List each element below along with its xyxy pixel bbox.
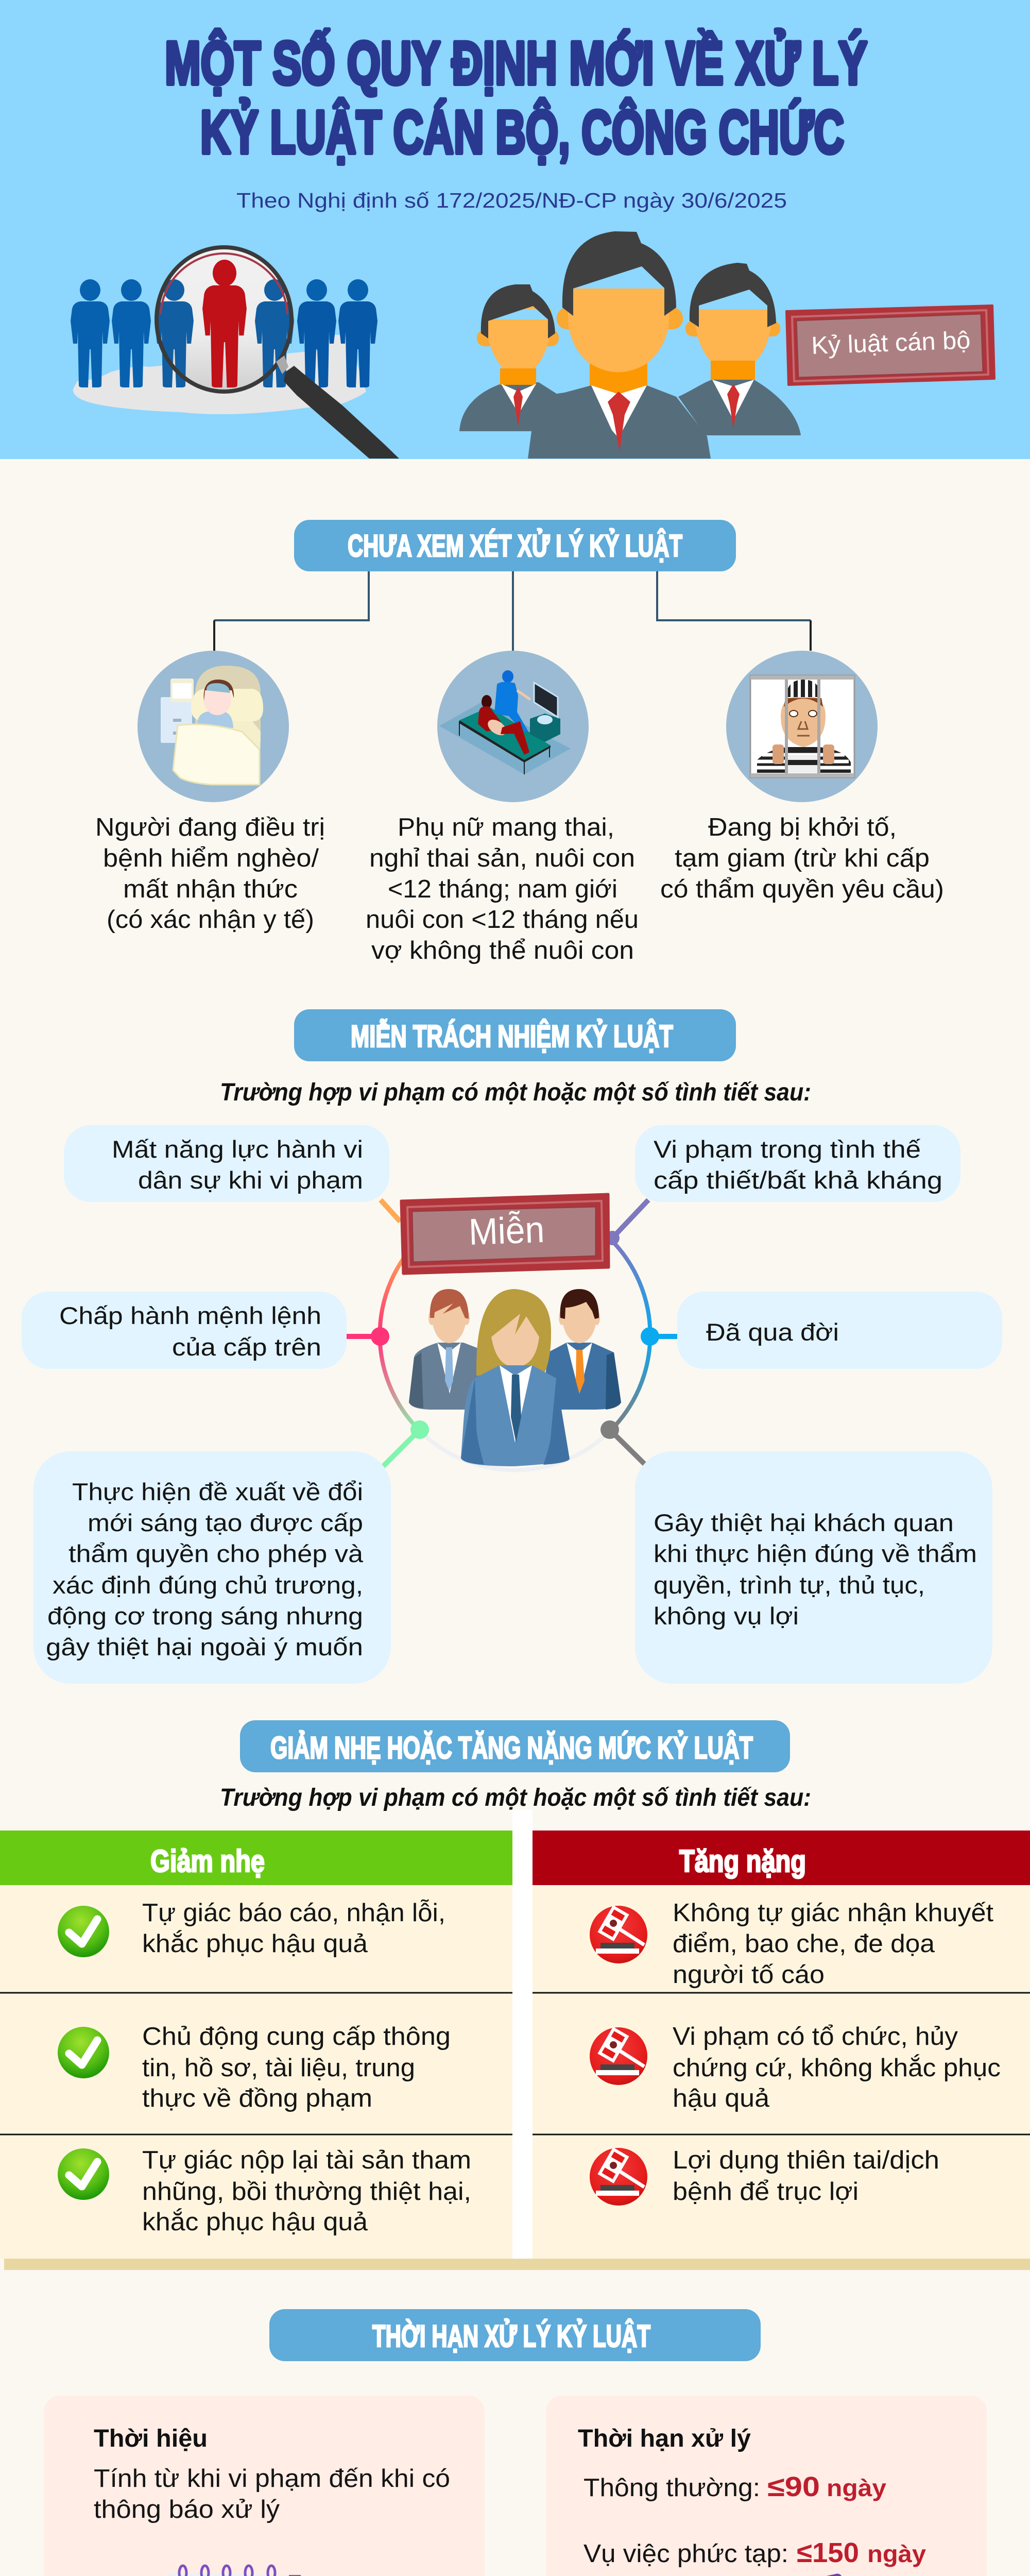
callout: objective damage: quyền, trình tự, thủ tục, <box>654 1571 925 1599</box>
callout: innovation proposal: động cơ trong sáng nhưng <box>47 1602 363 1630</box>
callout: innovation proposal: gây thiệt hại ngoài ý muốn <box>46 1633 363 1660</box>
panel: Thời hiệu: thông báo xử lý <box>94 2496 280 2523</box>
column: Giảm nhẹ: Chủ động cung cấp thông <box>142 2023 451 2050</box>
illustration: three officials <box>459 231 801 459</box>
text block: pregnancy: vợ không thể nuôi con <box>371 937 634 964</box>
column: Giảm nhẹ <box>0 1831 512 2259</box>
title <box>165 29 867 166</box>
callout: lost capacity: Mất năng lực hành vi <box>112 1136 363 1163</box>
text block: illness: mất nhận thức <box>123 875 298 903</box>
panel: Thời hiệu: Tính từ khi vi phạm đến khi có <box>94 2465 450 2493</box>
callout: innovation proposal: thẩm quyền cho phép và <box>68 1540 364 1567</box>
callout: innovation proposal: mới sáng tạo được cấp <box>88 1509 363 1536</box>
column: Tăng nặng: Vi phạm có tổ chức, hủy <box>673 2023 958 2050</box>
icon: prisoner behind bars <box>726 651 878 802</box>
callout: innovation proposal <box>33 1451 391 1684</box>
stamp: Kỷ luật cán bộ: Kỷ luật cán bộ <box>811 327 971 360</box>
stamp: Kỷ luật cán bộ <box>786 306 994 385</box>
callout: lost capacity <box>64 1125 389 1202</box>
callout: innovation proposal: Thực hiện đề xuất về đổi <box>72 1478 363 1505</box>
subheading: Trường hợp vi phạm có một hoặc một số tình tiết sau: <box>220 1784 811 1811</box>
column: Tăng nặng: bệnh để trục lợi <box>673 2178 859 2206</box>
column: Tăng nặng: người tố cáo <box>673 1961 825 1989</box>
column: Tăng nặng: chứng cứ, không khắc phục <box>673 2054 1001 2082</box>
panel: Thời hiệu <box>44 2396 485 2576</box>
panel: Thời hạn xử lý: Thời hạn xử lý <box>578 2425 751 2452</box>
illustration: magnifier over crowd <box>71 247 399 459</box>
column: Tăng nặng: Không tự giác nhận khuyết <box>673 1899 993 1927</box>
connector lines <box>214 571 811 651</box>
heading: Thời hạn xử lý kỷ luật: THỜI HẠN XỬ LÝ KỶ LUẬT <box>372 2319 650 2353</box>
panel: Thời hạn xử lý: Vụ việc phức tạp: <box>583 2540 788 2568</box>
icon: sick person in bed <box>138 651 289 802</box>
icon: pregnant woman ultrasound <box>437 651 589 802</box>
column: Tăng nặng: điểm, bao che, đe dọa <box>673 1930 935 1958</box>
text block: pregnancy: <12 tháng; nam giới <box>388 875 617 903</box>
text block: illness: (có xác nhận y tế) <box>107 906 314 934</box>
callout: following orders <box>22 1292 347 1369</box>
stamp: Miễn <box>401 1194 609 1274</box>
callout: objective damage: Gây thiệt hại khách quan <box>654 1509 954 1536</box>
heading: Giảm nhẹ hoặc tăng nặng: GIẢM NHẸ HOẶC TĂNG NẶNG MỨC KỶ LUẬT <box>270 1731 753 1765</box>
callout: force majeure: cấp thiết/bất khả kháng <box>654 1166 942 1194</box>
text block: pregnancy: nuôi con <12 tháng nếu <box>366 906 639 934</box>
callout: lost capacity: dân sự khi vi phạm <box>138 1166 363 1194</box>
text block: prosecution: tạm giam (trừ khi cấp <box>675 844 930 872</box>
heading: Chưa xem xét xử lý kỷ luật <box>294 520 736 571</box>
diagram: ring with spokes <box>347 1200 677 1470</box>
panel: Thời hạn xử lý: ngày <box>867 2540 926 2567</box>
column: Giảm nhẹ: thực về đồng phạm <box>142 2084 372 2112</box>
callout: objective damage <box>635 1451 992 1684</box>
heading: Miễn trách nhiệm kỷ luật: MIỄN TRÁCH NHIỆM KỶ LUẬT <box>351 1019 673 1054</box>
panel: hero <box>0 0 1030 459</box>
heading: Chưa xem xét xử lý kỷ luật: CHƯA XEM XÉT XỬ LÝ KỶ LUẬT <box>348 529 682 563</box>
stamp: Miễn: Miễn <box>468 1209 545 1253</box>
heading: Miễn trách nhiệm kỷ luật <box>294 1009 736 1061</box>
callout: innovation proposal: xác định đúng chủ trương, <box>53 1571 363 1599</box>
panel: Thời hạn xử lý <box>546 2396 987 2576</box>
callout: force majeure: Vi phạm trong tình thế <box>654 1136 921 1163</box>
illustration: three colleagues <box>409 1289 621 1466</box>
callout: objective damage: khi thực hiện đúng về thẩm <box>654 1540 977 1567</box>
panel: Thời hạn xử lý: ≤90 <box>767 2471 820 2502</box>
panel: Thời hạn xử lý: Thông thường: <box>583 2474 760 2502</box>
column: Tăng nặng: Lợi dụng thiên tai/dịch <box>673 2146 939 2174</box>
column: Giảm nhẹ: khắc phục hậu quả <box>142 2208 368 2236</box>
column: Giảm nhẹ: Giảm nhẹ <box>150 1844 265 1878</box>
heading: Giảm nhẹ hoặc tăng nặng <box>240 1720 790 1772</box>
callout: objective damage: không vụ lợi <box>654 1602 799 1630</box>
panel: Thời hiệu: Thời hiệu <box>94 2425 208 2452</box>
heading: Thời hạn xử lý kỷ luật <box>269 2309 761 2361</box>
subtitle: Theo Nghị định số 172/2025/NĐ-CP ngày 30/6/2025 <box>236 189 787 212</box>
icon: calendar <box>144 2566 315 2576</box>
text block: prosecution <box>660 814 944 903</box>
text block: prosecution: có thẩm quyền yêu cầu) <box>660 875 944 903</box>
text block: illness: Người đang điều trị <box>95 814 325 841</box>
subheading: Trường hợp vi phạm có một hoặc một số tình tiết sau: <box>220 1079 811 1106</box>
callout: force majeure <box>635 1125 960 1202</box>
text block: prosecution: Đang bị khởi tố, <box>708 814 897 841</box>
column: Tăng nặng: Tăng nặng <box>679 1844 806 1878</box>
panel: Thời hạn xử lý: ngày <box>827 2475 886 2501</box>
column: Giảm nhẹ: Tự giác nộp lại tài sản tham <box>142 2146 471 2174</box>
callout: following orders: Chấp hành mệnh lệnh <box>59 1302 321 1329</box>
text block: pregnancy: Phụ nữ mang thai, <box>398 814 614 841</box>
text block: pregnancy: nghỉ thai sản, nuôi con <box>369 844 635 872</box>
text block: pregnancy <box>366 814 639 964</box>
column: Giảm nhẹ: tin, hồ sơ, tài liệu, trung <box>142 2054 415 2082</box>
text block: illness: bệnh hiểm nghèo/ <box>103 844 319 872</box>
panel: Thời hạn xử lý: ≤150 <box>797 2537 859 2568</box>
callout: deceased <box>677 1292 1002 1369</box>
text block: illness <box>95 814 325 934</box>
callout: deceased: Đã qua đời <box>706 1318 839 1346</box>
panel: mitigating and aggravating table <box>0 1810 1030 2270</box>
column: Giảm nhẹ: nhũng, bồi thường thiệt hại, <box>142 2178 471 2206</box>
callout: following orders: của cấp trên <box>172 1333 321 1361</box>
column: Tăng nặng: hậu quả <box>673 2084 770 2112</box>
column: Giảm nhẹ: khắc phục hậu quả <box>142 1930 368 1958</box>
column: Giảm nhẹ: Tự giác báo cáo, nhận lỗi, <box>142 1899 445 1927</box>
column: Tăng nặng <box>533 1831 1030 2259</box>
